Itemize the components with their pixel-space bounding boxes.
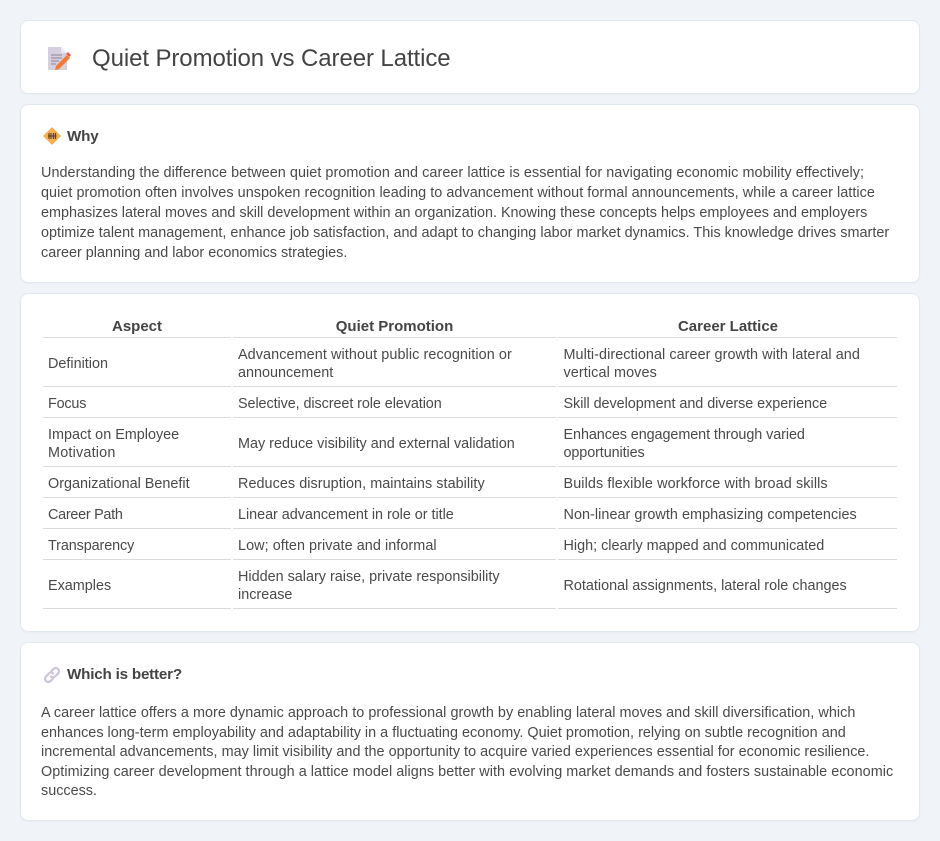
row: impact on employee motivation: Enhances engagement through varied [564, 427, 805, 443]
row: organizational benefit: Reduces disruption, maintains stability [238, 476, 485, 492]
row: examples: Examples [48, 578, 111, 594]
row: career path: Non-linear growth emphasizing competencies [564, 507, 857, 523]
row: career path [48, 507, 857, 523]
icon: warning diamond [43, 127, 61, 145]
text block: which is better paragraph: success. [41, 783, 97, 799]
row: examples: Hidden salary raise, private responsibility [238, 569, 500, 585]
heading: why: Why [67, 128, 98, 145]
panel: title card [20, 20, 920, 94]
panel: which is better card [20, 642, 920, 821]
text block: which is better paragraph: A career lattice offers a more dynamic approach to professional growth by enabling lateral moves and skill diversification, which [41, 705, 855, 721]
row: transparency: Low; often private and informal [238, 538, 437, 554]
row: transparency [48, 538, 824, 554]
heading: which is better: Which is better? [67, 666, 182, 683]
panel: why card [20, 104, 920, 283]
row: examples [48, 569, 847, 603]
row: focus: Focus [48, 396, 86, 412]
row: transparency: Transparency [48, 538, 134, 554]
icon: chain link [44, 666, 60, 684]
icon: memo with pencil [48, 47, 71, 70]
row: definition: Advancement without public recognition or [238, 347, 512, 363]
row: examples: increase [238, 587, 292, 603]
row: impact on employee motivation: May reduce visibility and external validation [238, 436, 515, 452]
text block: why paragraph [41, 165, 889, 261]
column headers [112, 318, 778, 335]
text block: why paragraph: emphasizes lateral moves and skill development within an organization. Knowing these concepts helps employees and employers [41, 205, 867, 221]
column headers: Quiet Promotion [336, 318, 453, 335]
row: focus [48, 396, 827, 412]
column headers: Career Lattice [678, 318, 778, 335]
text block: which is better paragraph: Optimizing career development through a lattice model aligns better with evolving market demands and fosters sustainable economic [41, 764, 893, 780]
row: impact on employee motivation [48, 427, 805, 461]
row: definition: Definition [48, 356, 108, 372]
row: organizational benefit: Organizational Benefit [48, 476, 190, 492]
text block: why paragraph: career planning and labor economics strategies. [41, 245, 347, 261]
row: definition [48, 347, 860, 381]
row: organizational benefit: Builds flexible workforce with broad skills [564, 476, 828, 492]
text block: why paragraph: Understanding the difference between quiet promotion and career lattice is essential for navigating economic mobility effectively; [41, 165, 864, 181]
text block: which is better paragraph [41, 705, 893, 799]
text block: which is better paragraph: incremental advancements, may limit visibility and the opportunity to acquire varied experiences essential for economic resilience. [41, 744, 869, 760]
row: definition: announcement [238, 365, 333, 381]
row: career path: Linear advancement in role or title [238, 507, 454, 523]
title: Quiet Promotion vs Career Lattice [92, 45, 451, 72]
row: focus: Skill development and diverse experience [564, 396, 827, 412]
text block: which is better paragraph: enhances long-term employability and adaptability in a fluctuating economy. Quiet promotion, relying on subtle recognition and [41, 725, 846, 741]
text block: why paragraph: quiet promotion often involves unspoken recognition leading to advancement without formal announcements, while a career lattice [41, 185, 875, 201]
row: transparency: High; clearly mapped and communicated [564, 538, 824, 554]
table: comparison [43, 318, 897, 609]
row: career path: Career Path [48, 507, 123, 523]
row: impact on employee motivation: Motivation [48, 445, 116, 461]
column headers: Aspect [112, 318, 162, 335]
row: examples: Rotational assignments, lateral role changes [564, 578, 847, 594]
panel: comparison table card [20, 293, 920, 632]
row: definition: Multi-directional career growth with lateral and [564, 347, 860, 363]
text block: why paragraph: optimize talent management, enhance job satisfaction, and adapt to changing labor market dynamics. This knowledge drives smarter [41, 225, 889, 241]
row: impact on employee motivation: opportunities [564, 445, 645, 461]
row: impact on employee motivation: Impact on Employee [48, 427, 179, 443]
row: organizational benefit [48, 476, 828, 492]
row: focus: Selective, discreet role elevation [238, 396, 442, 412]
row: definition: vertical moves [564, 365, 657, 381]
